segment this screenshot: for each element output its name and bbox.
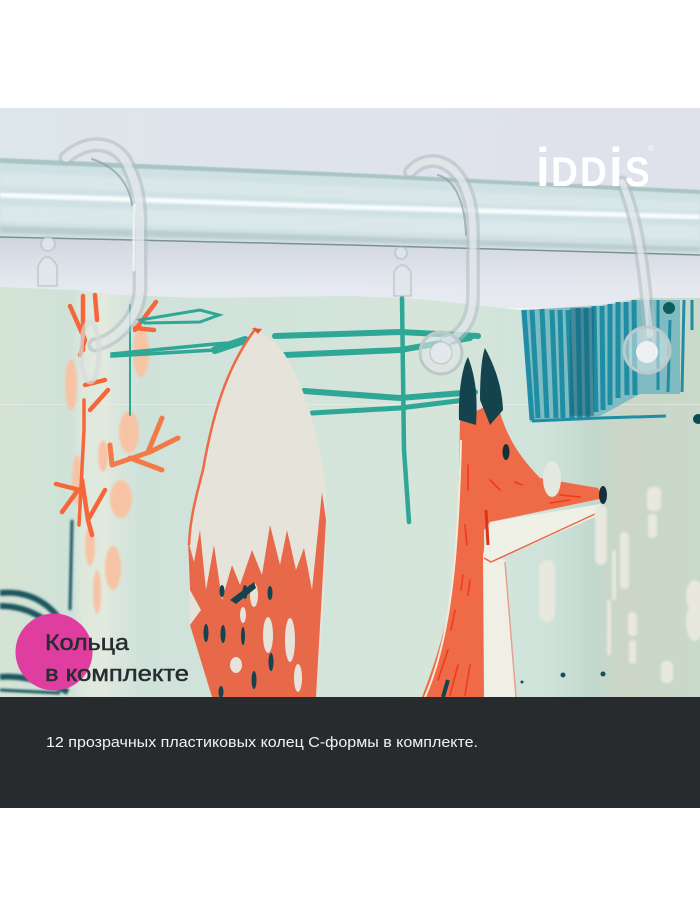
wall backdrop (0, 108, 700, 310)
brand name (536, 136, 650, 198)
ring 3 (622, 182, 650, 335)
photo: curtain rod with rings and fox-print curtain (0, 108, 700, 698)
pattern: blue hatched rectangle (521, 300, 700, 424)
badge heading (45, 630, 189, 686)
registered mark: ® (648, 144, 654, 153)
ring 2 (410, 161, 473, 342)
pattern: snow dots (539, 487, 700, 683)
fox ears (459, 348, 503, 425)
heading line 1: Кольца (45, 630, 130, 655)
brand name: D (551, 149, 578, 196)
fox eye and nose (502, 444, 607, 504)
curtain fabric (0, 287, 700, 697)
curtain rod (0, 158, 700, 255)
caption text: 12 прозрачных пластиковых колец С-формы в комплекте. (46, 734, 478, 751)
pattern: teal lines (112, 298, 478, 522)
pattern: orange branches and peach berries (56, 295, 178, 614)
dark caption band (0, 697, 700, 808)
transparent bead drips (38, 237, 411, 296)
pattern: dark leaf at lower left (0, 520, 72, 693)
ring 1 (66, 145, 140, 382)
ring 2 grommet (420, 332, 462, 374)
pattern: dark specks (520, 672, 606, 684)
brand name: S (625, 149, 650, 196)
logo (536, 136, 654, 198)
pink accent circle (16, 614, 92, 690)
illustration: fox tail (188, 328, 327, 698)
heading line 2: в комплекте (45, 661, 189, 686)
ring 3 grommet (624, 327, 670, 373)
brand name: i (536, 136, 550, 198)
brand name: i (609, 136, 623, 198)
fox fur strokes (438, 465, 580, 695)
brand name: D (580, 149, 607, 196)
illustration: fox head and body (422, 348, 607, 697)
